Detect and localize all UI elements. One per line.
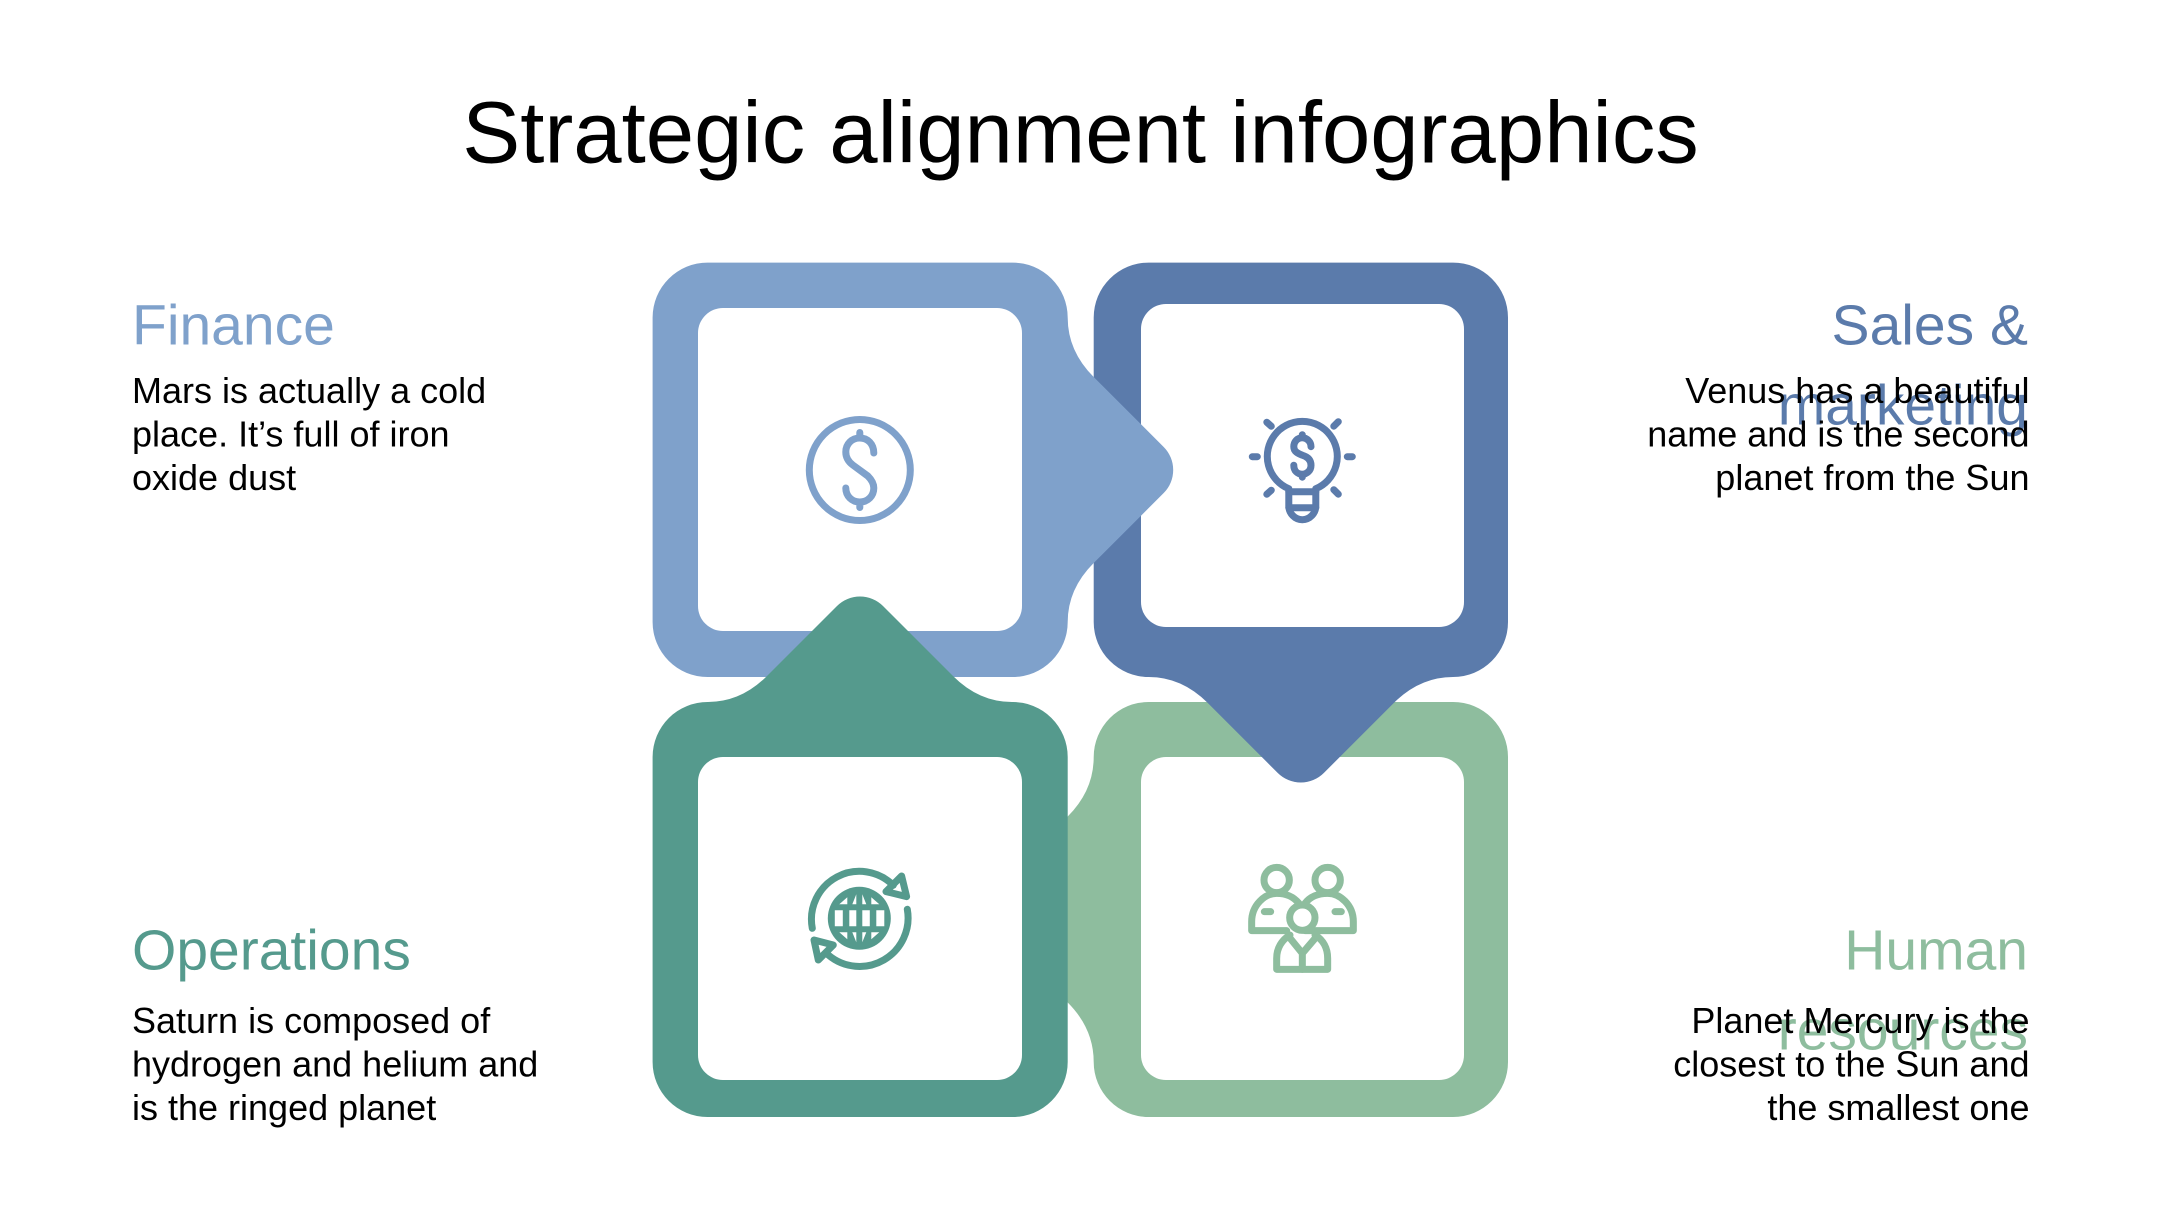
body: sales and marketing: Venus has a beautiful bbox=[1685, 370, 2030, 411]
icon: people bbox=[1252, 867, 1353, 969]
body: sales and marketing: name and is the second bbox=[1647, 414, 2030, 454]
heading: finance: Finance bbox=[132, 294, 335, 358]
heading: sales and marketing: Sales & bbox=[1832, 294, 2028, 358]
card inner bbox=[698, 308, 1022, 631]
text block: sales and marketing bbox=[1647, 294, 2030, 498]
panel: sales and marketing card bbox=[1094, 263, 1508, 782]
heading: human resources: Human bbox=[1844, 918, 2028, 982]
body: operations: Saturn is composed of bbox=[132, 1000, 491, 1041]
card inner bbox=[1141, 757, 1464, 1080]
panel: finance card bbox=[653, 263, 1173, 677]
card shape with up arrow bbox=[653, 597, 1068, 1117]
title: Strategic alignment infographics bbox=[462, 84, 1699, 182]
body: finance: place. It’s full of iron bbox=[132, 414, 450, 454]
body: operations: is the ringed planet bbox=[132, 1087, 436, 1128]
body: sales and marketing: planet from the Sun bbox=[1715, 457, 2030, 498]
icon: dollar coin bbox=[809, 420, 910, 520]
card shape with right arrow bbox=[653, 263, 1173, 677]
body: human resources: the smallest one bbox=[1767, 1087, 2030, 1128]
body: human resources: Planet Mercury is the bbox=[1691, 1000, 2030, 1041]
icon: light bulb with dollar bbox=[1252, 421, 1352, 520]
heading: human resources: resources bbox=[1778, 998, 2028, 1062]
card inner bbox=[1141, 304, 1464, 627]
body: human resources: closest to the Sun and bbox=[1673, 1044, 2030, 1084]
panel: human resources card bbox=[988, 702, 1508, 1117]
heading: operations: Operations bbox=[132, 918, 411, 982]
card inner bbox=[698, 757, 1022, 1080]
panel: operations card bbox=[653, 597, 1068, 1117]
icon: globe with rotating arrows bbox=[811, 871, 908, 966]
body: operations: hydrogen and helium and bbox=[132, 1044, 538, 1084]
heading: sales and marketing: marketing bbox=[1778, 374, 2028, 438]
card shape with down arrow bbox=[1094, 263, 1508, 782]
body: finance: Mars is actually a cold bbox=[132, 370, 486, 411]
text block: operations bbox=[132, 918, 538, 1128]
card shape with left arrow bbox=[988, 702, 1508, 1117]
body: finance: oxide dust bbox=[132, 457, 296, 498]
text block: human resources bbox=[1673, 918, 2030, 1128]
text block: finance bbox=[132, 294, 486, 498]
